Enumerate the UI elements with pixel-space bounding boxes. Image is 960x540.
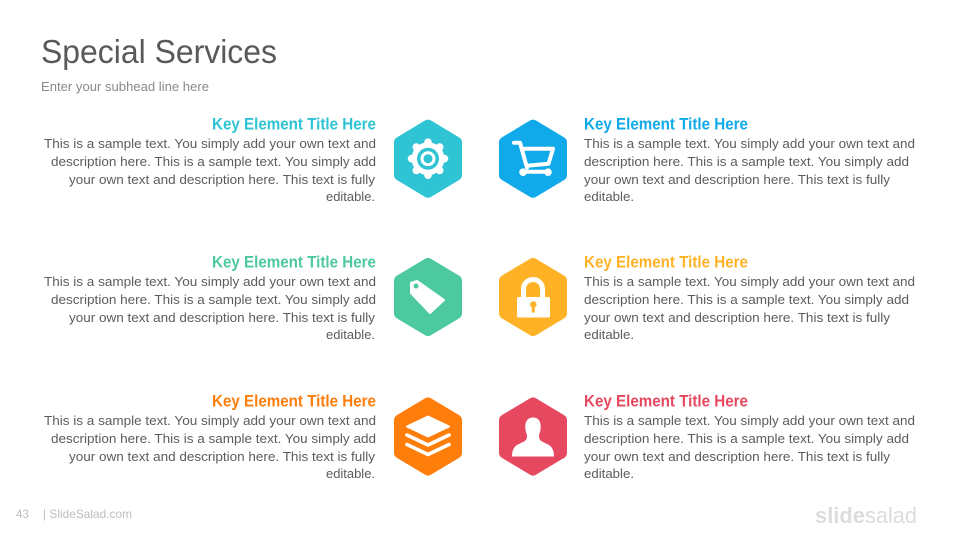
text block: middle right: description here. This is a sample text. You simply add bbox=[584, 293, 909, 307]
subhead: Enter your subhead line here bbox=[41, 79, 209, 94]
text block: top left bbox=[44, 116, 376, 204]
text block: bottom left bbox=[44, 392, 376, 481]
text block: top right: Key Element Title Here bbox=[584, 116, 748, 134]
text block: middle right bbox=[584, 254, 915, 342]
text block: middle right: Key Element Title Here bbox=[584, 254, 748, 272]
text block: bottom right: editable. bbox=[584, 467, 634, 481]
text block: middle left: editable. bbox=[326, 328, 375, 342]
text block: bottom left: editable. bbox=[326, 467, 375, 481]
text block: top right: This is a sample text. You simply add your own text and bbox=[584, 137, 915, 151]
text block: bottom right: your own text and description here. This text is fully bbox=[584, 450, 891, 464]
text block: middle left: This is a sample text. You simply add your own text and bbox=[44, 275, 376, 289]
text block: middle right: your own text and description here. This text is fully bbox=[584, 311, 891, 325]
icon: person hexagon bbox=[505, 404, 561, 470]
text block: top left: This is a sample text. You simply add your own text and bbox=[44, 137, 376, 151]
icon: price tag hexagon bbox=[400, 264, 456, 330]
page number: 43 bbox=[16, 507, 29, 521]
text block: middle left: Key Element Title Here bbox=[212, 254, 376, 272]
text block: top left: your own text and description here. This text is fully bbox=[69, 173, 376, 187]
logo: slidesalad: salad bbox=[865, 503, 917, 528]
text block: bottom right: Key Element Title Here bbox=[584, 392, 748, 410]
text block: top left: editable. bbox=[326, 190, 375, 204]
icon: shopping cart hexagon bbox=[505, 126, 561, 192]
logo: slidesalad: slide bbox=[815, 503, 865, 528]
text block: bottom left: This is a sample text. You simply add your own text and bbox=[44, 414, 376, 428]
icon: padlock hexagon bbox=[505, 264, 561, 330]
text block: middle left: description here. This is a sample text. You simply add bbox=[51, 293, 376, 307]
logo: slidesalad bbox=[815, 503, 917, 528]
text block: bottom right: description here. This is a sample text. You simply add bbox=[584, 432, 909, 446]
text block: bottom right: This is a sample text. You simply add your own text and bbox=[584, 414, 915, 428]
text block: middle left bbox=[44, 254, 376, 342]
text block: bottom left: description here. This is a sample text. You simply add bbox=[51, 432, 376, 446]
footer site name: | SlideSalad.com bbox=[43, 507, 132, 521]
text block: bottom left: your own text and description here. This text is fully bbox=[69, 450, 376, 464]
text block: bottom right bbox=[584, 392, 915, 481]
text block: bottom left: Key Element Title Here bbox=[212, 392, 376, 410]
text block: top right bbox=[584, 116, 915, 204]
text block: top right: your own text and description here. This text is fully bbox=[584, 173, 891, 187]
title: Special Services bbox=[41, 33, 277, 70]
text block: top left: Key Element Title Here bbox=[212, 116, 376, 134]
icon: layers hexagon bbox=[400, 404, 456, 470]
text block: middle left: your own text and description here. This text is fully bbox=[69, 311, 376, 325]
icon: gear hexagon bbox=[400, 126, 456, 192]
text block: middle right: This is a sample text. You simply add your own text and bbox=[584, 275, 915, 289]
text block: middle right: editable. bbox=[584, 328, 634, 342]
text block: top right: editable. bbox=[584, 190, 634, 204]
text block: top left: description here. This is a sample text. You simply add bbox=[51, 155, 376, 169]
text block: top right: description here. This is a sample text. You simply add bbox=[584, 155, 909, 169]
